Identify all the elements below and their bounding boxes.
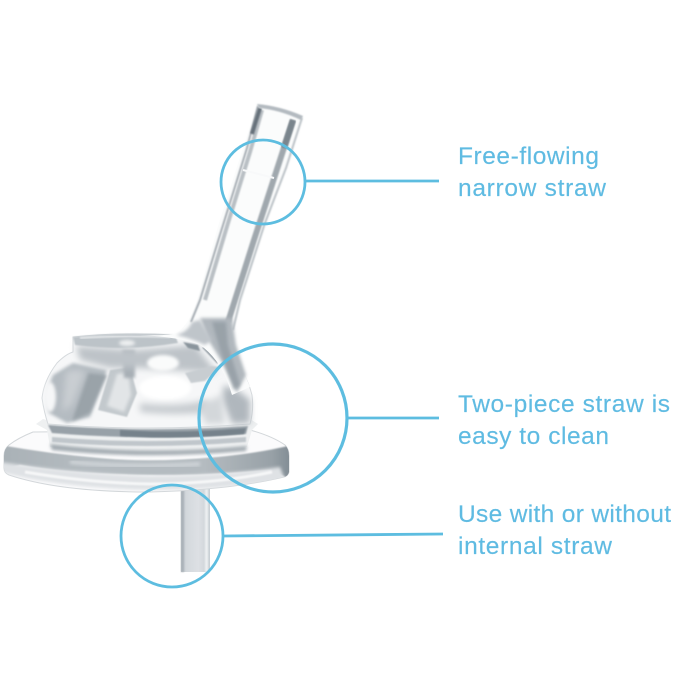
label: free-flowing narrow straw: Free-flowing [458, 143, 599, 170]
dome [42, 334, 253, 428]
label: two-piece straw: Two-piece straw is [458, 391, 670, 418]
label: free-flowing narrow straw: narrow straw [458, 175, 606, 202]
label: use with or without internal straw: internal straw [458, 533, 612, 560]
right shoulder [200, 385, 250, 424]
label: use with or without internal straw: Use with or without [458, 501, 671, 528]
neck rings [36, 419, 258, 455]
label: two-piece straw: easy to clean [458, 423, 609, 450]
ring: straw joint [199, 344, 347, 492]
leader line: internal straw [223, 534, 443, 536]
label: free-flowing narrow straw [458, 143, 606, 202]
ring: straw tip [221, 140, 305, 224]
product: straw valve [0, 104, 303, 572]
left bulb [44, 363, 107, 423]
straw flare [176, 318, 246, 393]
label: use with or without internal straw [458, 501, 671, 560]
infographic: straw anatomy [4, 104, 671, 588]
straw tube [140, 104, 303, 395]
leader line: straw tip [305, 180, 439, 182]
callout: narrow straw [221, 140, 606, 224]
internal straw [181, 488, 210, 572]
inner fin [98, 350, 137, 417]
lid [73, 334, 218, 373]
label: two-piece straw [458, 391, 670, 450]
callout: two-piece straw [199, 344, 670, 492]
leader line: straw joint [347, 417, 439, 419]
callout: internal straw [121, 485, 671, 587]
flange base [0, 430, 292, 492]
straw walls [191, 104, 303, 330]
ring: internal straw [121, 485, 223, 587]
window highlights [139, 366, 220, 414]
